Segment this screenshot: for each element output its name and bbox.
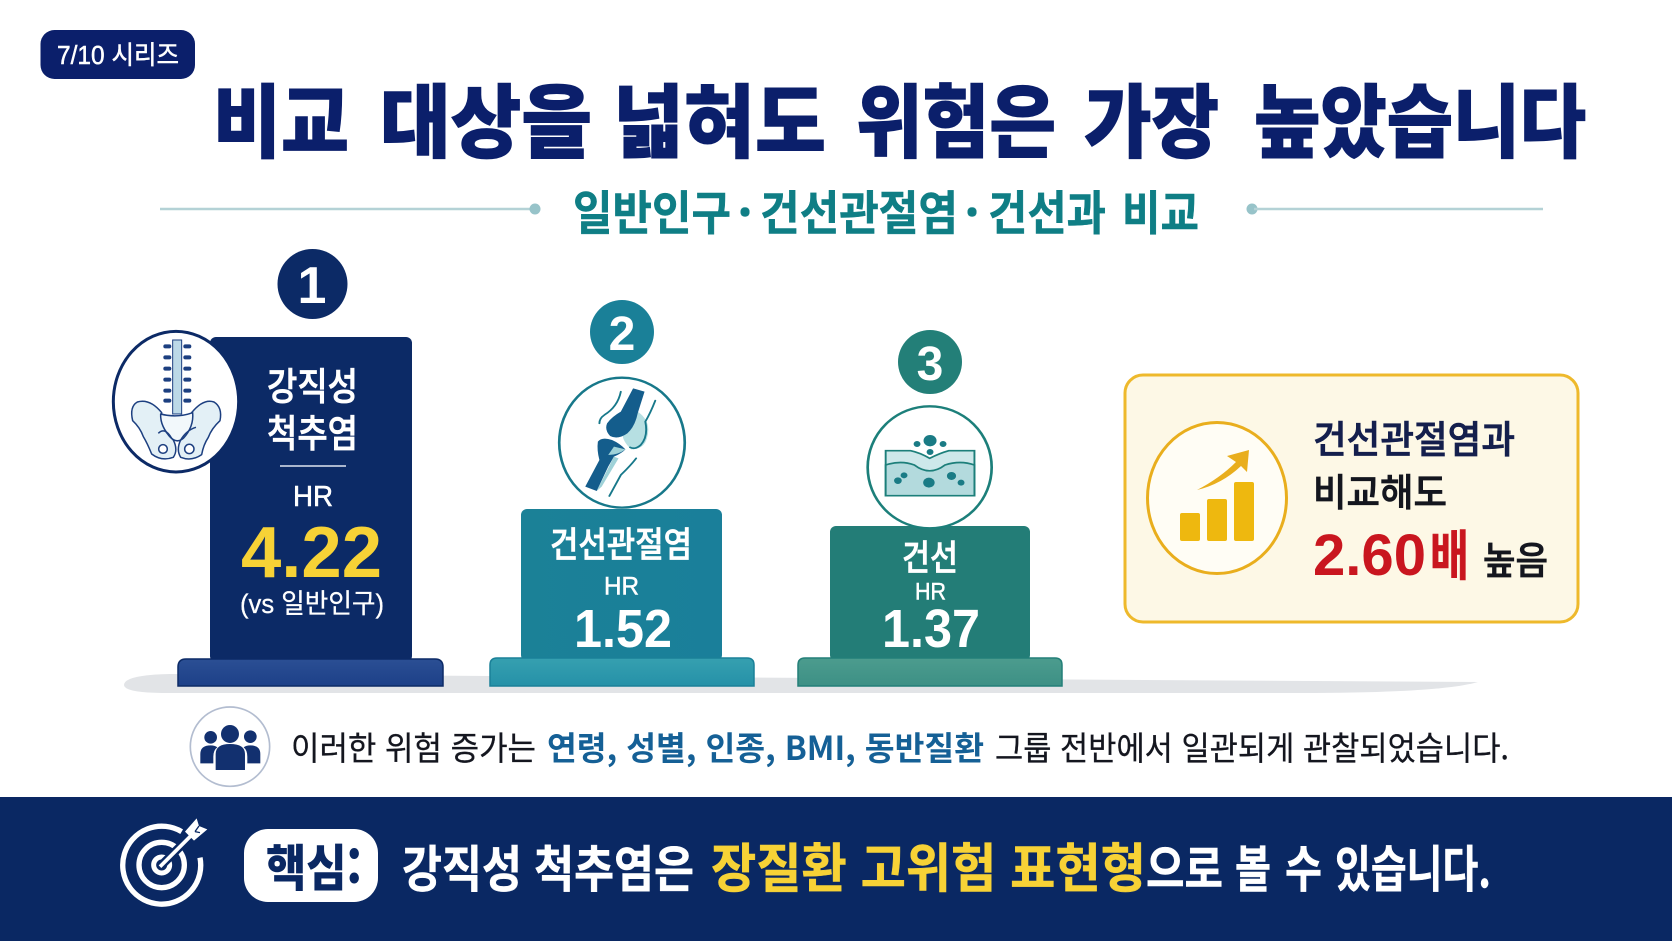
podium column 1 (210, 337, 412, 662)
title: 넓혀도 (613, 59, 826, 175)
label: 건선: 건선 (902, 530, 958, 581)
podium base 3 (798, 658, 1062, 686)
panel: psoriasis, rank 3 (798, 330, 1062, 686)
note text: 이러한 위험 증가는 (291, 722, 536, 770)
podium base 1 (178, 659, 443, 686)
podium base 2 (490, 658, 754, 686)
rank badge 3 (898, 330, 962, 394)
note text: 연령, 성별, 인종, BMI, 동반질환 (547, 722, 984, 770)
note text (291, 722, 1509, 770)
rank badge 3: 3 (917, 338, 943, 391)
label: 강직성 척추염: 강직성 (267, 356, 358, 411)
callout text: 2.60 (1313, 523, 1426, 588)
title: 가장 (1084, 59, 1219, 175)
floor shadow (124, 674, 1478, 693)
title: 높았습니다 (1254, 59, 1586, 175)
title: 비교 (213, 59, 349, 175)
takeaway text: 강직성 척추염은 (402, 830, 694, 902)
callout text: 비교해도 (1313, 462, 1447, 517)
rank badge 1 (278, 249, 348, 319)
title: 위험은 (856, 59, 1056, 175)
rank badge 2: 2 (609, 308, 635, 361)
takeaway text: 으로 (1146, 830, 1223, 902)
subtitle with divider lines: 건선관절염 (760, 175, 958, 244)
callout text (1313, 409, 1548, 591)
takeaway text (402, 827, 1491, 903)
HR label 1: HR (293, 481, 333, 513)
takeaway text: 장질환 고위험 표현형 (711, 827, 1146, 903)
HR value 1.37: 1.37 (882, 599, 980, 659)
note row (190, 707, 1509, 786)
title (213, 59, 1586, 175)
series badge: 7/10 시리즈 (57, 40, 179, 70)
note text: 그룹 전반에서 일관되게 관찰되었습니다. (995, 722, 1509, 770)
icon: target with arrow (123, 818, 207, 904)
series badge (40, 30, 195, 79)
subtitle with divider lines (160, 175, 1543, 244)
callout text: 건선관절염과 (1313, 409, 1515, 464)
subtitle with divider lines: · (964, 175, 980, 244)
subtitle with divider lines: · (737, 175, 753, 244)
podium column 2 (521, 509, 722, 661)
subtitle with divider lines: 일반인구 (573, 175, 731, 244)
podium column 3 (830, 526, 1030, 661)
icon: rising bar chart (1148, 422, 1286, 574)
rank badge 1: 1 (298, 257, 326, 315)
HR value 4.22: 4.22 (241, 513, 382, 593)
icon: people group (190, 707, 270, 786)
icon: skin lesion (868, 406, 992, 528)
takeaway text: 수 (1285, 830, 1322, 902)
bottom takeaway band (0, 797, 1672, 941)
icon: knee joint (559, 378, 685, 508)
label: 건선관절염: 건선관절염 (550, 517, 692, 568)
comparison note: (vs 일반인구) (240, 589, 384, 619)
HR value 1.52: 1.52 (574, 599, 672, 659)
callout: 2.60 times higher (1125, 375, 1578, 622)
takeaway text: 볼 (1235, 830, 1271, 902)
panel: psoriatic arthritis, rank 2 (490, 300, 754, 686)
takeaway text: 있습니다. (1335, 830, 1491, 902)
title: 대상을 (380, 59, 592, 175)
callout text: 배 (1430, 512, 1469, 591)
key label pill: 핵심: (266, 829, 362, 901)
HR label 2: HR (604, 572, 639, 600)
HR label 3: HR (915, 578, 946, 606)
callout text: 높음 (1483, 530, 1548, 585)
rank badge 2 (590, 300, 654, 364)
subtitle with divider lines: 비교 (1122, 175, 1199, 244)
icon: spine and pelvis (113, 331, 239, 472)
panel: ankylosing spondylitis, rank 1 (113, 249, 443, 686)
label: 강직성 척추염: 척추염 (267, 403, 358, 458)
subtitle with divider lines: 건선과 (988, 175, 1106, 244)
label: 강직성 척추염 (267, 356, 358, 458)
